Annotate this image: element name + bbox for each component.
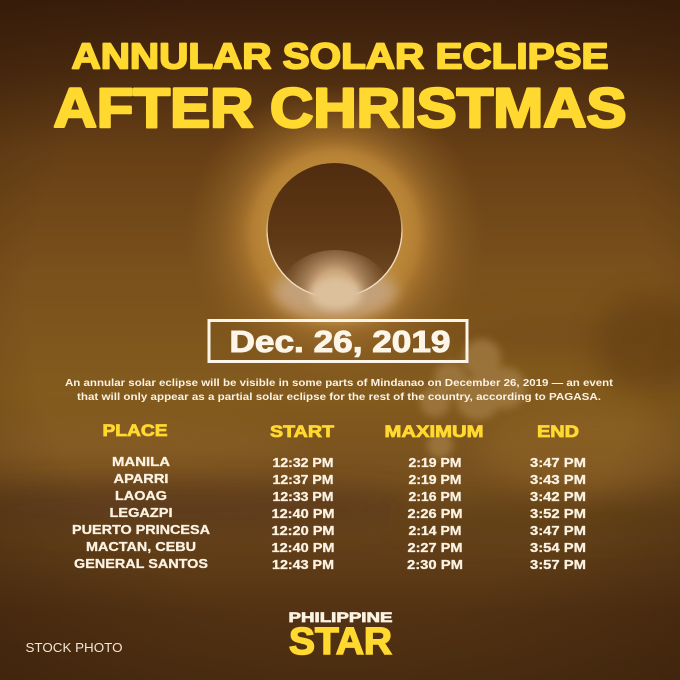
column: maximum: 2:27 PM — [408, 540, 462, 555]
column: start: 12:37 PM — [272, 472, 334, 487]
column: maximum: 2:30 PM — [407, 557, 463, 572]
column: maximum: 2:19 PM — [408, 455, 462, 470]
column: place: MACTAN, CEBU — [86, 539, 196, 554]
flare behind disc — [273, 265, 397, 319]
column: start: 12:43 PM — [272, 557, 334, 572]
eclipse glow ring — [255, 152, 415, 312]
title: AFTER CHRISTMAS — [54, 76, 626, 139]
column: place: APARRI — [114, 471, 168, 486]
date box — [209, 320, 467, 362]
column: end — [530, 455, 586, 572]
column: end: 3:57 PM — [530, 557, 586, 572]
column: maximum: 2:14 PM — [408, 523, 462, 538]
description: An annular solar eclipse will be visible in some parts of Mindanao on December 26, 2019 — an event — [65, 377, 614, 389]
logo: Philippine Star: PHILIPPINE — [288, 609, 392, 625]
column: maximum: 2:16 PM — [408, 489, 462, 504]
title: ANNULAR SOLAR ECLIPSE — [72, 36, 608, 76]
column: start — [272, 455, 334, 572]
description: that will only appear as a partial solar eclipse for the rest of the country, according to PAGASA. — [77, 391, 601, 403]
column: maximum: 2:26 PM — [408, 506, 462, 521]
photo credit: STOCK PHOTO — [26, 640, 123, 655]
table headers: START — [270, 422, 335, 441]
table headers: END — [537, 422, 579, 441]
column: place: MANILA — [112, 454, 171, 469]
table headers — [102, 421, 579, 441]
cloud — [420, 339, 526, 458]
sun ring — [267, 162, 402, 298]
column: end: 3:43 PM — [530, 472, 586, 487]
table headers: MAXIMUM — [384, 422, 484, 441]
column: place: GENERAL SANTOS — [74, 556, 208, 571]
column: end: 3:47 PM — [530, 455, 586, 470]
column: place: LEGAZPI — [110, 505, 172, 520]
column: place: PUERTO PRINCESA — [72, 522, 211, 537]
column: start: 12:20 PM — [272, 523, 334, 538]
column: start: 12:33 PM — [272, 489, 334, 504]
light bloom — [285, 250, 384, 294]
logo: Philippine Star: STAR — [289, 621, 392, 663]
column: start: 12:32 PM — [272, 455, 334, 470]
column: end: 3:47 PM — [530, 523, 586, 538]
eclipse — [258, 156, 412, 327]
description — [65, 377, 614, 403]
moon disc — [268, 163, 402, 297]
column: start: 12:40 PM — [272, 540, 334, 555]
title — [54, 36, 626, 139]
column: maximum: 2:19 PM — [408, 472, 462, 487]
column: end: 3:52 PM — [530, 506, 586, 521]
column: start: 12:40 PM — [272, 506, 334, 521]
date box: Dec. 26, 2019 — [230, 324, 450, 359]
column: place: LAOAG — [115, 488, 167, 503]
column: place — [72, 454, 211, 571]
column: maximum — [407, 455, 463, 572]
column: end: 3:54 PM — [530, 540, 586, 555]
table headers: PLACE — [102, 421, 168, 440]
column: end: 3:42 PM — [530, 489, 586, 504]
